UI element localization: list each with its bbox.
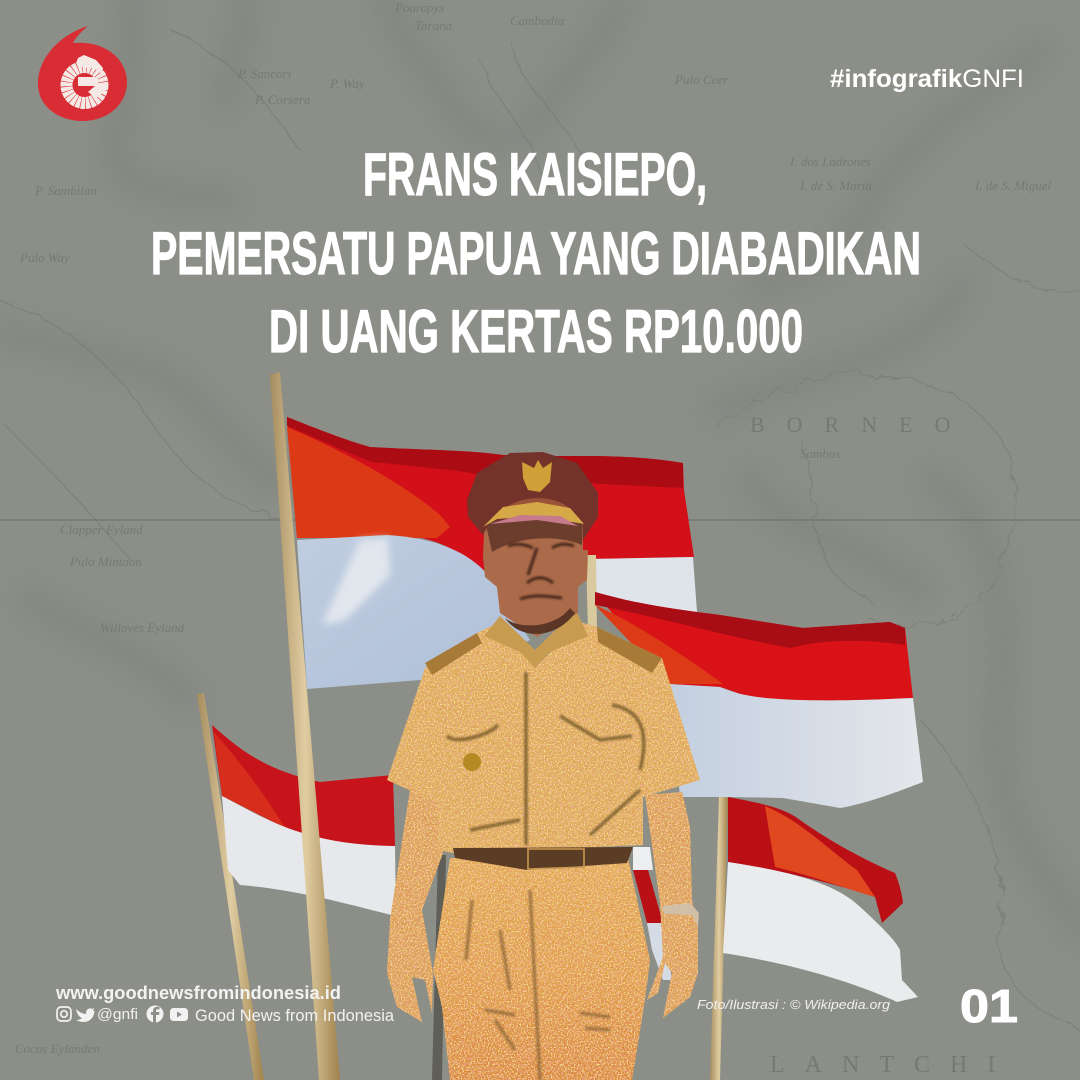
badge on shirt [463, 753, 481, 771]
background: antique map: P. Way [329, 76, 365, 91]
icon: facebook [146, 1006, 164, 1023]
jaw shadow [505, 608, 575, 634]
background: antique map: LANTCHI [770, 1052, 1015, 1078]
background: antique map: Clapper Eyland [60, 522, 143, 537]
background: antique map: Pulo Mintaon [69, 554, 142, 569]
background: antique map: I. dos Ladrones [789, 154, 871, 169]
cap [467, 452, 598, 540]
background: antique map: Willoves Eyland [100, 620, 185, 635]
flag: lower right [710, 797, 918, 1080]
background: antique map: Cocos Eylanden [15, 1041, 100, 1056]
collar [484, 610, 588, 668]
channel name: Good News from Indonesia [195, 1006, 395, 1025]
neck and face [483, 510, 588, 637]
shirt [387, 622, 700, 853]
background: antique map: P. Sancori [237, 66, 292, 81]
title: DI UANG KERTAS RP10.000 [269, 298, 803, 365]
background: antique map: Poaropys [394, 0, 444, 15]
background: antique map: Tarana [415, 18, 453, 33]
belt [453, 847, 633, 870]
handle: @gnfi [97, 1006, 138, 1023]
watch [662, 903, 699, 927]
social row [57, 1006, 395, 1025]
pants [433, 858, 650, 1080]
icon: youtube [170, 1008, 188, 1021]
background: antique map: I. de S. Miguel [974, 178, 1052, 193]
left forearm [387, 790, 443, 1022]
icon: instagram [57, 1007, 71, 1021]
figure body [387, 622, 700, 1080]
flag: right flag [595, 592, 923, 808]
page number: 01 [960, 980, 1018, 1032]
flag: main large flag [287, 417, 697, 689]
flag: lower left [197, 693, 396, 1080]
epaulettes [425, 633, 482, 675]
background: antique map: Pulo Ceer [674, 72, 729, 87]
background: antique map: Cambodia [510, 13, 565, 28]
logo [38, 26, 127, 121]
website: www.goodnewsfromindonesia.id [55, 983, 341, 1003]
cap badge: garuda [522, 460, 552, 492]
icon: twitter [76, 1008, 94, 1022]
cap band [483, 502, 584, 527]
photo credit: Foto/Ilustrasi : © Wikipedia.org [697, 998, 890, 1012]
background: antique map: Pulo Way [19, 250, 70, 265]
right forearm [645, 792, 698, 1018]
background: antique map: I. de S. Maria [799, 178, 872, 193]
background: antique map: BORNEO [750, 412, 972, 437]
title: FRANS KAISIEPO, [363, 141, 707, 208]
facial features [508, 544, 574, 599]
title [151, 141, 921, 365]
background: antique map: Sambas [800, 446, 840, 461]
shirt folds [447, 672, 644, 845]
portrait: Frans Kaisiepo [387, 452, 700, 1080]
pants creases [466, 890, 610, 1080]
flag fragment behind figure [432, 847, 672, 1080]
background: antique map: P. Corsera [254, 92, 311, 107]
flag: big pole [270, 372, 340, 1080]
hashtag: #infografikGNFI [830, 65, 1024, 93]
background: antique map: P. Sambilan [34, 183, 97, 198]
hair shadow [485, 515, 583, 552]
